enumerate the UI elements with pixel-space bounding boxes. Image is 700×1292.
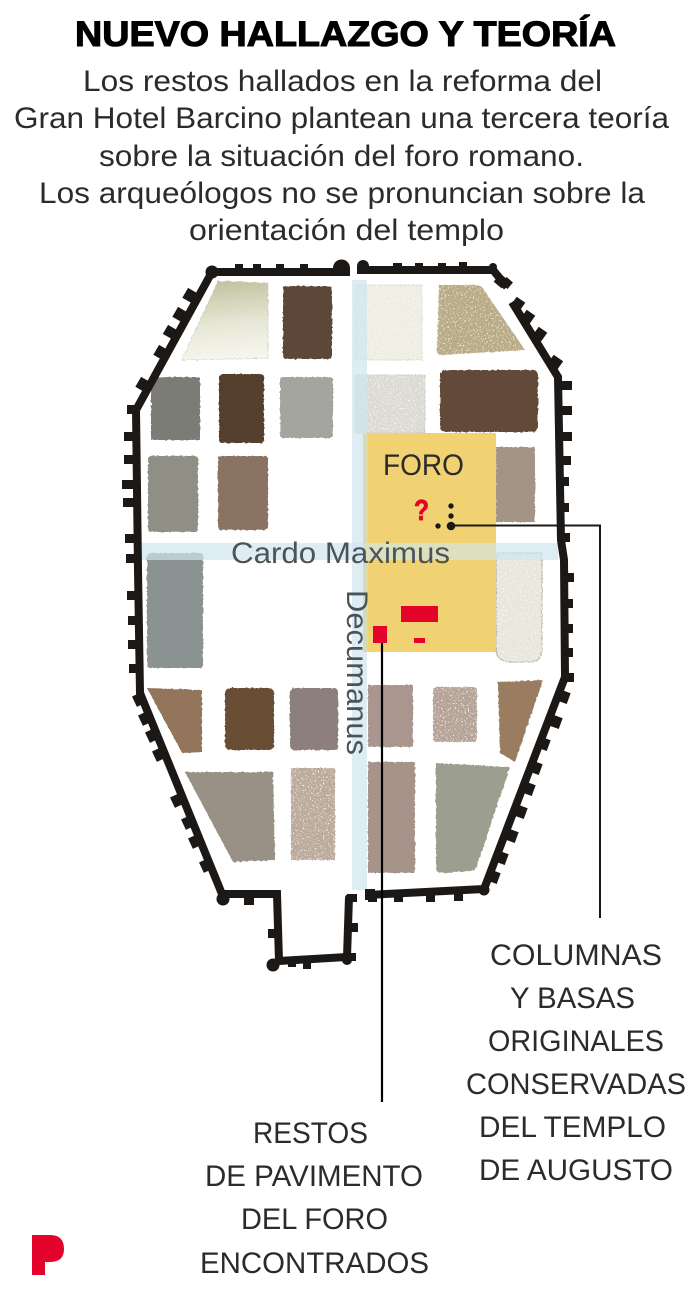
road: Cardo Maximus band bbox=[138, 543, 558, 560]
callout: columnas: DE AUGUSTO bbox=[479, 1154, 673, 1187]
temple column dots bbox=[435, 503, 455, 530]
question mark: ? bbox=[414, 495, 429, 527]
city blocks bbox=[147, 281, 543, 873]
label: Decumanus: Decumanus bbox=[340, 590, 373, 755]
callout: restos: DEL FORO bbox=[241, 1203, 388, 1236]
leader line: columns bbox=[451, 526, 600, 918]
title: NUEVO HALLAZGO Y TEORÍA bbox=[75, 14, 616, 54]
speckled pale blocks bbox=[291, 285, 542, 860]
callout: restos bbox=[200, 1117, 429, 1280]
callout: restos: ENCONTRADOS bbox=[200, 1247, 429, 1280]
wall towers bbox=[122, 262, 574, 969]
intro text: orientación del templo bbox=[189, 214, 504, 247]
leader line: pavement bbox=[381, 643, 383, 1102]
intro text bbox=[14, 65, 669, 247]
callout: columnas: ORIGINALES bbox=[488, 1025, 664, 1058]
callout: columnas bbox=[466, 939, 686, 1187]
callout: restos: RESTOS bbox=[253, 1117, 368, 1150]
label: Cardo Maximus: Cardo Maximus bbox=[231, 537, 450, 570]
callout: columnas: DEL TEMPLO bbox=[479, 1111, 666, 1144]
red pavement remains bbox=[373, 606, 438, 643]
label: FORO: FORO bbox=[383, 449, 464, 482]
forum area bbox=[363, 433, 496, 652]
callout: restos: DE PAVIMENTO bbox=[205, 1160, 423, 1193]
callout: columnas: CONSERVADAS bbox=[466, 1068, 686, 1101]
road: Decumanus band bbox=[352, 280, 367, 890]
intro text: sobre la situación del foro romano. bbox=[99, 140, 584, 173]
callout: columnas: COLUMNAS bbox=[490, 939, 662, 972]
intro text: Gran Hotel Barcino plantean una tercera teoría bbox=[14, 102, 669, 135]
intro text: Los restos hallados en la reforma del bbox=[83, 65, 602, 98]
city wall bbox=[122, 260, 574, 972]
logo bbox=[32, 1235, 64, 1275]
callout: columnas: Y BASAS bbox=[510, 982, 635, 1015]
intro text: Los arqueólogos no se pronuncian sobre la bbox=[39, 177, 645, 210]
